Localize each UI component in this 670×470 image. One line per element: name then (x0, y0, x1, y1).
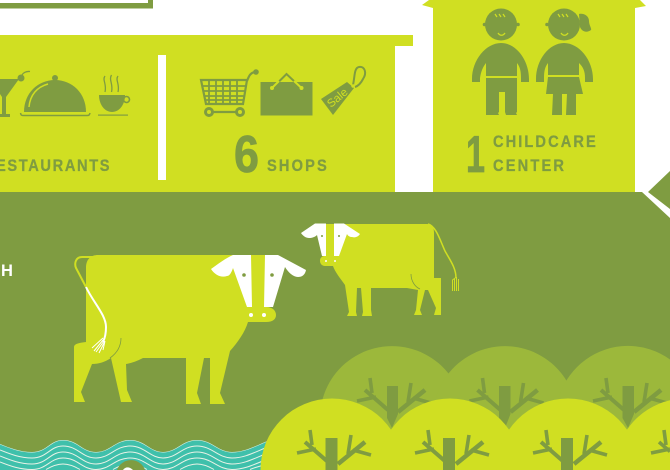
icon: river badge (117, 460, 145, 470)
icon: sale tag: Sale (325, 86, 351, 110)
front row of trees (260, 398, 670, 470)
panel: childcare center (422, 0, 646, 192)
river waves (0, 438, 270, 470)
childcare label: CHILDCARE (493, 133, 596, 151)
icon: serving cloche (20, 75, 90, 116)
icon: shopping cart (201, 69, 259, 116)
panel: childcare center: CENTER (493, 157, 564, 175)
illustration: large cow (74, 255, 306, 404)
panel: green ground (0, 192, 670, 470)
clipped heading letter: H (1, 262, 13, 280)
tree trunk and branches (357, 378, 667, 428)
icon: martini glass (0, 71, 30, 117)
shops count: 6 (234, 126, 259, 184)
shops label: SHOPS (267, 157, 327, 175)
icon: boy (472, 8, 529, 115)
childcare count: 1 (466, 126, 485, 184)
diamond panel corner (648, 171, 670, 209)
panel: restaurants and shops (0, 35, 413, 192)
back row of trees (320, 346, 670, 440)
icon: coffee cup (98, 75, 130, 116)
icon: shopping bag (260, 74, 312, 116)
tree trunk and branches (297, 430, 670, 470)
icon: sale tag (321, 67, 365, 115)
illustration: small cow (301, 224, 458, 316)
icon: girl (536, 8, 593, 115)
frame corner (0, 0, 153, 8)
